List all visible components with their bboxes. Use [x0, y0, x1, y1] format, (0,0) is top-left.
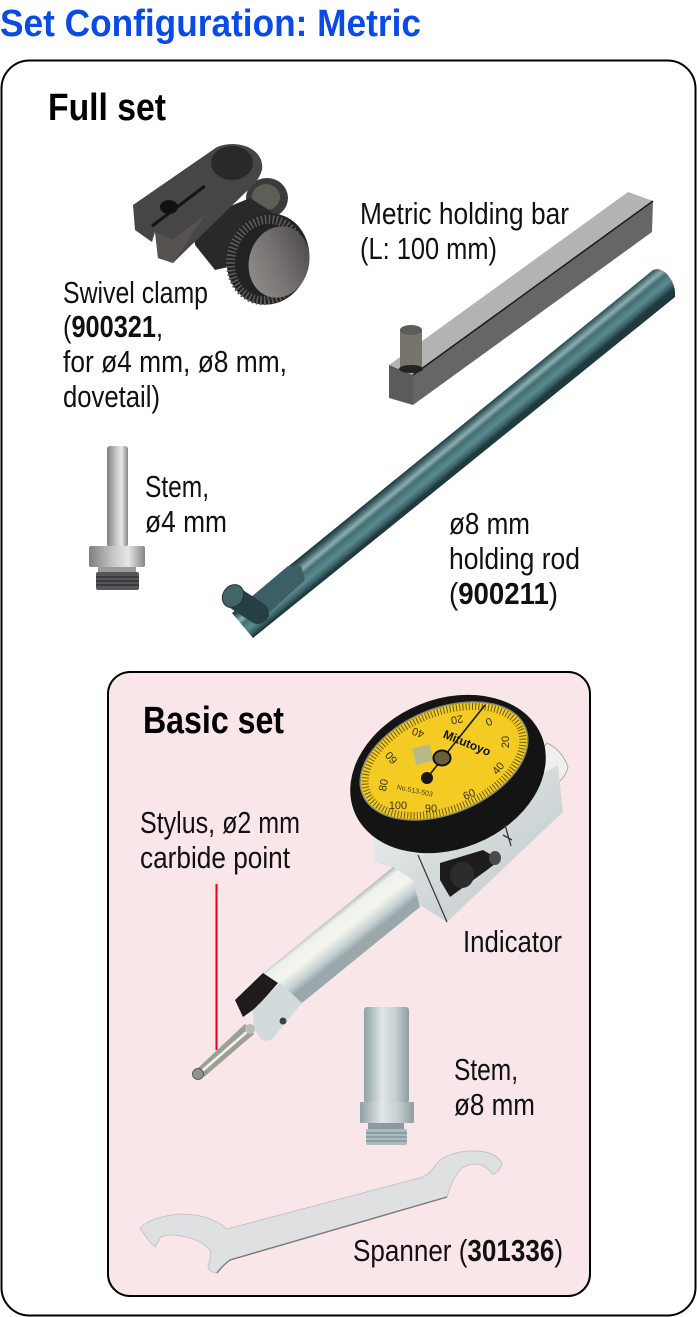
label: metric holding bar: (L: 100 mm): [360, 231, 497, 266]
label: swivel clamp: for ø4 mm, ø8 mm,: [63, 344, 287, 379]
label: stem 8 mm: [454, 1052, 535, 1122]
label: stem 8 mm: Stem,: [454, 1052, 518, 1087]
stylus: [192, 1024, 255, 1080]
label: metric holding bar: [360, 196, 569, 266]
dial face: 100: [389, 800, 407, 812]
label: holding rod: [449, 506, 580, 611]
dial face: [343, 679, 545, 843]
indicator barrel: [235, 867, 420, 1041]
icon: stem 4 mm: [89, 446, 145, 590]
dial face: 40: [490, 760, 507, 777]
icon: metric holding bar: [389, 192, 653, 405]
label: holding rod: ø8 mm: [449, 506, 530, 541]
label: holding rod: (900211): [449, 576, 558, 611]
label: holding rod: holding rod: [449, 541, 580, 576]
dial face: 80: [377, 778, 391, 792]
label: stylus: Stylus, ø2 mm: [140, 805, 300, 840]
icon: holding rod: [218, 269, 675, 638]
label: stylus: [140, 805, 300, 875]
label: swivel clamp: dovetail): [63, 379, 160, 414]
dial face: 20: [500, 736, 512, 748]
bezel: [326, 667, 570, 881]
label: stem 4 mm: [145, 469, 227, 539]
label: swivel clamp: Swivel clamp: [63, 275, 208, 310]
dial face: 90: [425, 803, 437, 815]
icon: swivel clamp: [133, 144, 320, 314]
heading: basic set: Basic set: [143, 700, 284, 742]
dial face: 40: [411, 724, 426, 740]
icon: spanner: [140, 1151, 502, 1273]
label: stem 4 mm: ø4 mm: [145, 504, 227, 539]
label: stylus: carbide point: [140, 840, 290, 875]
dial face: Mitutoyo: [441, 727, 493, 759]
dial face: 20: [450, 712, 464, 726]
icon: stem 8 mm: [360, 1007, 414, 1145]
label: stem 4 mm: Stem,: [145, 469, 209, 504]
label: swivel clamp: [63, 275, 287, 414]
label: indicator: Indicator: [463, 924, 562, 959]
dial face: 60: [383, 749, 400, 766]
clamp lever: [440, 825, 512, 897]
label: metric holding bar: Metric holding bar: [360, 196, 569, 231]
icon: dial indicator: [192, 667, 570, 1080]
label: spanner: Spanner (301336): [353, 1233, 563, 1268]
label: swivel clamp: (900321,: [63, 309, 163, 344]
dial face: No.513-503: [396, 784, 433, 799]
label: stem 8 mm: ø8 mm: [454, 1087, 535, 1122]
leader line: stylus: [216, 884, 218, 1050]
dial face: 60: [461, 787, 478, 803]
panel: basic set: [108, 667, 590, 1296]
heading: full set: Full set: [48, 87, 166, 129]
title: Set Configuration: Metric: [0, 3, 421, 45]
dial face: 0: [483, 714, 494, 728]
indicator body: [373, 743, 568, 922]
